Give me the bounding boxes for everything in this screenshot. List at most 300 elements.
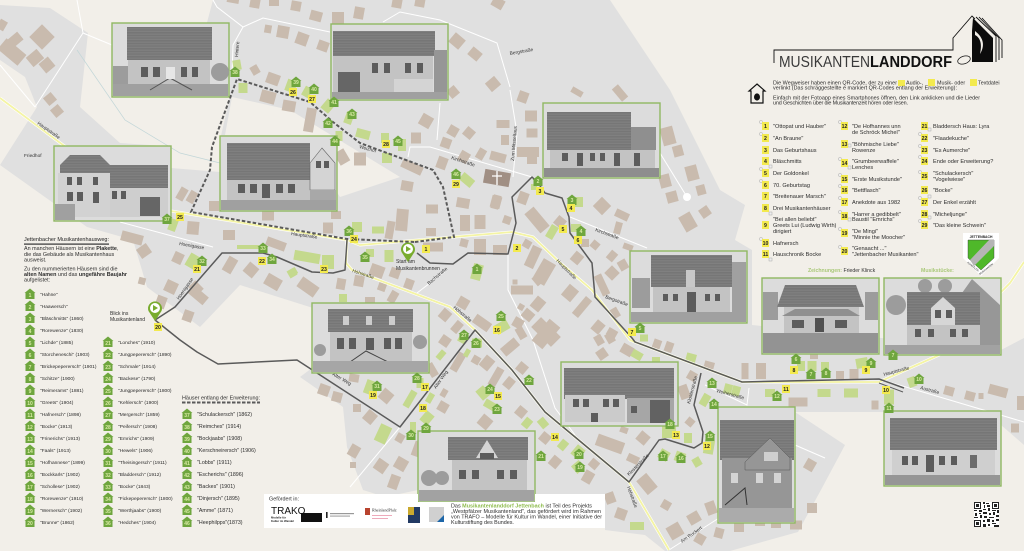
entry 2: "Haawersch" <box>40 304 68 310</box>
yellow QR-code markers on map: 2 <box>516 246 519 252</box>
legend: QR stories column 3: Bladdersch Haus: Lyra <box>933 124 990 130</box>
photo 12: house drawing <box>762 278 879 354</box>
green house markers on map: 30 <box>408 433 414 439</box>
church with cross <box>483 169 511 187</box>
entry 28: 28 <box>105 425 111 431</box>
yellow QR-code markers on map: 7 <box>631 330 634 336</box>
green house markers on map: 36 <box>346 229 352 235</box>
green house markers on map: 42 <box>325 121 331 127</box>
entry 32: "Bladdersch" (1912) <box>118 472 161 478</box>
green house markers on map: 9 <box>870 361 873 367</box>
green house markers on map: 41 <box>331 100 337 106</box>
entry 15: "Hofhannese" (1899) <box>40 460 85 466</box>
yellow QR-code markers on map: 18 <box>420 406 426 412</box>
street names: Bachstraße <box>426 266 449 287</box>
entry 23: "Schmale" (1914) <box>118 364 156 370</box>
green house markers on map: 34 <box>269 257 275 263</box>
main route <box>155 177 904 482</box>
green house markers on map: 45 <box>395 139 401 145</box>
intro text with QR/music/text symbols: Audio-, <box>906 80 924 86</box>
legend: QR stories column 1: 9 <box>764 223 767 229</box>
legend: QR stories column 2: "Genaacht ..." <box>852 246 886 252</box>
label: Start am Musikantenbrunnen: Start am <box>396 259 415 265</box>
project text: von TRAFO – Modelle für Kultur im Wandel, einer Initiative der <box>451 514 602 520</box>
entry 14: 14 <box>27 449 33 455</box>
green house markers on map: 22 <box>526 378 532 384</box>
legend: QR stories column 1: Hauschronik Bocke <box>773 252 821 258</box>
entry 1: "Hahne" <box>40 292 58 298</box>
photo 1: house drawing <box>112 23 229 97</box>
entry 33: 33 <box>105 485 111 491</box>
street names: Kirchstraße <box>450 155 476 169</box>
green house markers on map: 8 <box>825 371 828 377</box>
logo: Rheinland-Pfalz: RheinlandPfalz <box>372 508 397 512</box>
yellow QR-code markers on map: 16 <box>494 328 500 334</box>
street names: Alter Weg <box>433 369 450 390</box>
entry 8 <box>24 372 75 383</box>
entry 43: 43 <box>184 485 190 491</box>
legend: QR stories column 3: 23 <box>922 148 927 154</box>
legend: QR stories column 1: "Bei allen beliebt" <box>773 217 816 223</box>
green house markers on map: 38 <box>232 70 238 76</box>
legend: QR stories column 3: 27 <box>922 200 927 206</box>
heading: Jettenbacher Musikantenhausweg: Jettenbacher Musikantenhausweg: <box>24 237 109 243</box>
entry 40: 40 <box>184 449 190 455</box>
legend: QR stories column 2: 13 <box>842 142 847 148</box>
logo: TRAKO: Modelle für <box>271 516 287 520</box>
entry 44 <box>182 492 240 503</box>
photo 5: house drawing <box>543 103 660 178</box>
entry 21 <box>102 336 155 347</box>
legend: QR stories column 1: 10 <box>763 241 768 247</box>
legend: QR stories column 3: "Schulackersch" <box>933 171 973 177</box>
entry 14: "Faals" (1913) <box>40 448 71 454</box>
legend: QR stories column 2: Rowenze <box>852 148 875 154</box>
legend: QR stories column 1: "Breitenauer Marsch" <box>773 194 826 200</box>
green house markers on map: 39 <box>293 80 299 86</box>
entry 16 <box>24 468 80 479</box>
entry 19: "Wernersch" (1902) <box>40 508 83 514</box>
photo 6: house drawing <box>630 251 747 323</box>
legend: QR stories column 3: "Vogelwiese" <box>933 177 965 183</box>
yellow QR-code markers on map: 22 <box>259 259 265 265</box>
green house markers on map: 7 <box>892 353 895 359</box>
entry 32 <box>102 468 161 479</box>
yellow QR-code markers on map: 10 <box>883 388 889 394</box>
entry 22 <box>102 348 172 359</box>
green house markers on map: 7 <box>810 372 813 378</box>
yellow QR-code markers on map: 29 <box>453 182 459 188</box>
entry 8: "Schitze" (1900) <box>40 376 75 382</box>
legend: QR stories column 2: "De Hofhannes unn <box>852 124 901 130</box>
logo: federal <box>326 512 354 518</box>
entry 3: "Bläschmitts" (1860) <box>40 316 84 322</box>
entry 9 <box>24 384 84 395</box>
green house markers on map: 44 <box>332 139 338 145</box>
entry 16: 16 <box>27 473 33 479</box>
legend: QR stories column 3: 26 <box>922 188 927 194</box>
intro text: left list <box>24 246 128 284</box>
intro text: left list: die das Gebäude als Musikantenhaus <box>24 252 115 258</box>
legend: QR stories column 1: 4 <box>764 159 767 165</box>
photo 2: house drawing <box>331 24 448 100</box>
green house markers on map: 29 <box>423 426 429 432</box>
entry 12: 12 <box>27 425 33 431</box>
entry 10: 10 <box>27 401 33 407</box>
yellow QR-code markers on map: 6 <box>577 238 580 244</box>
entry 11: "Hafnersch" (1898) <box>40 412 81 418</box>
entry 24: 24 <box>105 377 111 383</box>
entry 22: "Jungpeperersch" (1890) <box>118 352 172 358</box>
entry 10 <box>24 396 74 407</box>
entry 30: 30 <box>105 449 111 455</box>
entry 35: 35 <box>105 509 111 515</box>
entry 36 <box>102 516 156 527</box>
entry 19: 19 <box>27 509 33 515</box>
green house markers on map: 27 <box>461 333 467 339</box>
street names: Klosterstraße <box>686 375 699 405</box>
legend: QR stories column 2 <box>838 120 918 258</box>
entry 22: 22 <box>105 353 111 359</box>
legend: QR stories column 3: 25 <box>922 174 927 180</box>
entry 18 <box>24 492 84 503</box>
logo: grey square <box>429 507 444 522</box>
yellow QR-code markers on map: 5 <box>562 227 565 233</box>
entry 31: "Theisingersch" (1911) <box>118 460 167 466</box>
legend: QR stories column 3 <box>918 122 993 229</box>
yellow QR-code markers on map: 9 <box>865 368 868 374</box>
legend: QR stories column 1: Der Goldonkel <box>773 171 809 177</box>
entry 2: 2 <box>29 305 32 311</box>
legend: QR stories column 2: 20 <box>842 249 847 255</box>
entry 4: 4 <box>29 329 32 335</box>
entry 5: "Lichde" (1885) <box>40 340 73 346</box>
yellow QR-code markers on map: 24 <box>351 237 357 243</box>
yellow QR-code markers on map: 21 <box>194 267 200 273</box>
logo: TRAKO: TRAKO <box>271 506 306 517</box>
legend: QR stories column 1: 2 <box>764 136 767 142</box>
legend: QR stories column 3: "Micheljunge" <box>933 212 967 218</box>
photo 3: house drawing <box>220 136 337 211</box>
street names: Hauptstraße <box>36 121 61 141</box>
entry 46: "Heephilpps"(1873) <box>197 520 243 526</box>
funding heading: Gefördert in: <box>269 496 299 502</box>
green house markers on map: 33 <box>260 246 266 252</box>
entry 28: "Peifersch" (1908) <box>118 424 157 430</box>
legend: QR stories column 1: "Ottopat und Hauber" <box>773 124 826 130</box>
legend: QR stories column 1: 7 <box>764 194 767 200</box>
entry 17: "Schollese" (1902) <box>40 484 80 490</box>
house list column 2 <box>102 336 173 527</box>
legend: QR stories column 1: Bläschmitts <box>773 159 802 165</box>
entry 1 <box>24 288 58 299</box>
street names: Austraße <box>919 385 940 396</box>
logo: Musikantenlanddorf <box>774 16 1002 71</box>
intro text with QR/music/text symbols: und Geschichten über die Musikantenzeit hören oder lesen. <box>773 100 908 106</box>
entry 16: "Bockkarls" (1902) <box>40 472 80 478</box>
intro text: left list: aufgelistet: <box>24 278 50 284</box>
label: Blick ins Musikantenland: Musikantenland <box>110 317 145 323</box>
street names: Hauptstraße <box>291 231 318 241</box>
entry 5 <box>24 336 73 347</box>
entry 29: "Emrichs" (1909) <box>118 436 155 442</box>
legend: QR stories column 2: Anekdote aus 1982 <box>852 200 900 206</box>
entry 21: 21 <box>105 341 111 347</box>
entry 29: 29 <box>105 437 111 443</box>
legend: QR stories column 1: Hafnersch <box>773 241 798 247</box>
entry 21: "Lonches" (1910) <box>118 340 155 346</box>
entry 13 <box>24 432 80 443</box>
legend: QR stories column 2: "Jettenbacher Musikanten" <box>852 252 918 258</box>
green house markers on map: 11 <box>886 406 892 412</box>
entry 39 <box>182 432 242 443</box>
entry 41 <box>182 456 232 467</box>
entry 36: 36 <box>105 521 111 527</box>
green house markers on map: 14 <box>711 402 717 408</box>
legend: QR stories column 2: "Erste Musikstunde" <box>852 177 902 183</box>
entry 3: 3 <box>29 317 32 323</box>
legend: QR stories column 2: 17 <box>842 200 847 206</box>
green house markers on map: 12 <box>774 394 780 400</box>
legend: QR stories column 1 <box>759 120 837 261</box>
green house markers on map: 28 <box>414 376 420 382</box>
entry 25: "Jungpeperersch" (1800) <box>118 388 172 394</box>
entry 30 <box>102 444 153 455</box>
street names: Klosterstraße <box>626 453 651 477</box>
entry 30: "Hewels" (1906) <box>118 448 153 454</box>
legend: QR stories column 2: 12 <box>842 124 847 130</box>
entry 3 <box>24 312 84 323</box>
legend: QR stories column 2: de Schröck Michel" <box>852 130 900 136</box>
legend: QR stories column 3: 21 <box>922 124 927 130</box>
entry 23: 23 <box>105 365 111 371</box>
green house markers on map: 20 <box>576 452 582 458</box>
legend: QR stories column 1: 5 <box>764 171 767 177</box>
logo: Musikantenlanddorf: MUSIKANTEN <box>779 54 870 71</box>
gardens <box>167 59 917 530</box>
entry 26 <box>102 396 159 407</box>
entry 40: "Kerschneirersch" (1906) <box>197 448 256 454</box>
intro text: left list: Zu den nummerierten Häusern sind die <box>24 266 118 272</box>
green house markers on map: 19 <box>577 465 583 471</box>
yellow QR-code markers on map: 25 <box>177 215 183 221</box>
entry 46 <box>182 516 243 527</box>
yellow QR-code markers on map: 28 <box>383 142 389 148</box>
photo 13: house drawing <box>884 278 1001 355</box>
entry 45: 45 <box>184 509 190 515</box>
street names: Bergstraße <box>509 47 534 57</box>
entry 13: 13 <box>27 437 33 443</box>
intro text: left list: ausweist. <box>24 258 46 264</box>
green house markers on map: 18 <box>667 422 673 428</box>
entry 45 <box>182 504 233 515</box>
legend: QR stories column 3: Ende oder Erweiterung? <box>933 159 993 165</box>
house list column 1 <box>24 288 97 527</box>
green house markers on map: 13 <box>709 381 715 387</box>
entry 20 <box>24 516 75 527</box>
entry 29 <box>102 432 155 443</box>
legend: QR stories column 1: Greets Lui (Ludwig Wirth) <box>773 223 837 229</box>
entry 15 <box>24 456 85 467</box>
legend: QR stories column 3: "Das kleine Schwein" <box>933 223 986 229</box>
entry 46: 46 <box>184 521 190 527</box>
photo 9: house drawing <box>561 362 678 426</box>
entry 34 <box>102 492 173 503</box>
intro text: left list: An manchen Häusern ist eine Plakette, <box>24 246 119 252</box>
legend: QR stories column 1: Das Geburtshaus <box>773 148 817 154</box>
street names: Hoenigasse <box>176 277 195 301</box>
QR code <box>974 502 999 527</box>
yellow QR-code markers on map: 15 <box>495 394 501 400</box>
street names: Am Ruckert <box>680 525 704 545</box>
entry 24: "Backese" (1790) <box>118 376 156 382</box>
legend: QR stories column 2: "Harrer a gedibbelt" <box>852 212 901 218</box>
entry 38: 38 <box>184 425 190 431</box>
street names: Alter Weg <box>331 372 352 387</box>
intro text with QR/music/text symbols: verlinkt (Das schräggestellte e markiert QR-Codes entlang der Erweiterung): <box>773 86 957 92</box>
project text: Kulturstiftung des Bundes. <box>451 520 514 526</box>
entry 27 <box>102 408 160 419</box>
street names: Friedhof <box>24 153 42 159</box>
entry 20: 20 <box>27 521 33 527</box>
house list column 3 <box>182 408 256 527</box>
entry 34: "Fickepeperersch" (1800) <box>118 496 173 502</box>
intro text with QR/music/text symbols <box>773 79 1000 106</box>
entry 31: 31 <box>105 461 111 467</box>
green house markers on map: 1 <box>476 267 479 273</box>
entry 13: "Frinerichs" (1913) <box>40 436 80 442</box>
legend: QR stories column 2: 18 <box>842 214 847 220</box>
pin: start <box>401 242 415 262</box>
legend: QR stories column 3: 22 <box>922 136 927 142</box>
entry 4 <box>24 324 84 335</box>
entry 26: "Kehlersch" (1900) <box>118 400 159 406</box>
entry 36: "Hedches" (1904) <box>118 520 156 526</box>
intro text with QR/music/text symbols: Textdatei <box>978 80 1000 86</box>
green house markers on map: 40 <box>311 87 317 93</box>
yellow QR-code markers on map: 1 <box>425 247 428 253</box>
heading: Häuser entlang der Erweiterung: Häuser entlang der Erweiterung: <box>182 396 260 402</box>
green house markers on map: 6 <box>795 357 798 363</box>
entry 28 <box>102 420 157 431</box>
yellow QR-code markers on map <box>154 88 890 450</box>
legend: QR stories column 2: 19 <box>842 231 847 237</box>
entry 4: "Rorewenze" (1830) <box>40 328 84 334</box>
legend: QR stories column 1: 11 <box>763 252 768 258</box>
legend: QR stories column 3: Der Enkel erzählt <box>933 200 976 206</box>
entry 10: "Greets" (1904) <box>40 400 74 406</box>
entry 42: 42 <box>184 473 190 479</box>
legend: QR stories column 1: "An Braune" <box>773 136 803 142</box>
legend: QR stories column 1: dirigiert <box>773 229 792 235</box>
coat of arms: Jettenbach <box>963 233 999 276</box>
photo 10: house drawing <box>718 407 795 523</box>
legend: QR stories column 1: 6 <box>764 183 767 189</box>
entry 23 <box>102 360 156 371</box>
street names: Höhstraße <box>351 268 375 281</box>
street names: Zum Mitsseltaus <box>510 125 519 161</box>
legend: QR stories column 1: 3 <box>764 148 767 154</box>
entry 7: 7 <box>29 365 32 371</box>
photo 7: house drawing <box>312 303 429 373</box>
legend: QR stories column 3: "Es Aumerche" <box>933 148 970 154</box>
entry 20: "Brunne" (1862) <box>40 520 75 526</box>
green house markers on map: 46 <box>453 172 459 178</box>
street names: Hauptstraße <box>883 365 910 378</box>
street names: Weiherstraße <box>715 388 745 401</box>
legend: QR stories column 2: "Böhmische Liebe" <box>852 142 899 148</box>
entry 32: 32 <box>105 473 111 479</box>
green house markers on map: 15 <box>707 434 713 440</box>
coat of arms: Jettenbach: MUSIKANTEN <box>978 262 994 276</box>
entry 7 <box>24 360 97 371</box>
entry 6: 6 <box>29 353 32 359</box>
street names: Bergstraße <box>604 294 629 308</box>
entry 27: 27 <box>105 413 111 419</box>
intro text: left list: alten Namen und das ungefähre Baujahr <box>24 272 128 278</box>
logo: Musikantenlanddorf: LANDDORF <box>870 54 952 71</box>
intro text with QR/music/text symbols: Die Wegweiser haben einen QR-Code, der zu einer <box>773 80 897 86</box>
green house markers on map: 23 <box>494 407 500 413</box>
entry 25: 25 <box>105 389 111 395</box>
green house markers on map: 3 <box>571 198 574 204</box>
entry 37 <box>182 408 252 419</box>
extension route dashed <box>191 79 454 242</box>
entry 27: "Mergersch" (1859) <box>118 412 160 418</box>
entry 35: "Werthjaabs" (1900) <box>118 508 162 514</box>
entry 37: "Schulackersch" (1862) <box>197 412 252 418</box>
entry 26: 26 <box>105 401 111 407</box>
entry 7: "Brickepeperersch" (1901) <box>40 364 97 370</box>
yellow QR-code markers on map: 3 <box>539 189 542 195</box>
label: Blick ins Musikantenland: Blick ins <box>110 311 128 317</box>
entry 11: 11 <box>27 413 33 419</box>
entry 44: 44 <box>184 497 190 503</box>
green house markers on map: 10 <box>916 377 922 383</box>
entry 17: 17 <box>27 485 33 491</box>
legend: QR stories column 1: 8 <box>764 206 767 212</box>
entry 24 <box>102 372 156 383</box>
entry 9: "Reimerams" (1881) <box>40 388 84 394</box>
legend: QR stories column 1: Drei Musikantenhäuser <box>773 206 831 212</box>
yellow QR-code markers on map: 26 <box>290 90 296 96</box>
yellow QR-code markers on map: 11 <box>783 387 789 393</box>
yellow QR-code markers on map: 4 <box>570 206 573 212</box>
entry 17 <box>24 480 80 491</box>
entry 43 <box>182 480 235 491</box>
green house markers on map: 16 <box>678 456 684 462</box>
yellow QR-code markers on map: 12 <box>704 444 710 450</box>
entry 42 <box>182 468 244 479</box>
legend: QR stories column 3: "Flaadekuche" <box>933 136 969 142</box>
yellow QR-code markers on map: 14 <box>552 435 558 441</box>
project text: „Westpfälzer Musikantenland", das gefördert wird im Rahmen <box>451 509 601 515</box>
green house markers on map: 24 <box>487 387 493 393</box>
logo: crest <box>408 507 420 523</box>
green house markers on map: 4 <box>580 229 583 235</box>
project text <box>451 504 602 526</box>
entry 41: 41 <box>184 461 190 467</box>
yellow QR-code markers on map: 20 <box>155 325 161 331</box>
icon: house with musician <box>749 84 765 103</box>
entry 44: "Dinjersch" (1895) <box>197 496 240 502</box>
entry 19 <box>24 504 83 515</box>
entry 31 <box>102 456 167 467</box>
green house markers on map: 17 <box>660 454 666 460</box>
yellow QR-code markers on map: 13 <box>673 433 679 439</box>
pin: Blick ins Musikantenland <box>148 301 162 321</box>
green house markers on map: 2 <box>537 179 540 185</box>
